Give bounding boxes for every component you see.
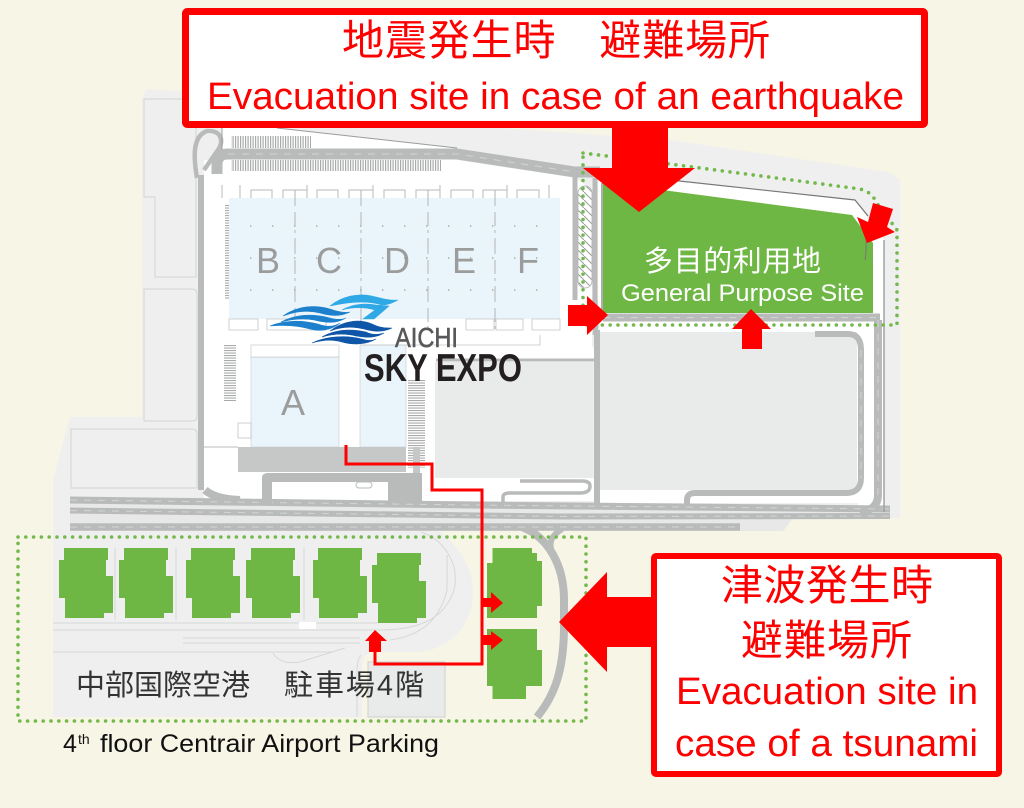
parking building 5 — [313, 548, 367, 618]
logo dark blue wave — [312, 321, 392, 344]
hall A service block — [251, 345, 339, 357]
hall letter E: E — [452, 240, 476, 281]
parking lot block — [368, 662, 445, 717]
evacuation route line — [346, 445, 482, 664]
red arrow: north east entry — [857, 203, 895, 243]
dotted boundary: earthquake site — [583, 153, 897, 325]
east exterior white strip — [858, 240, 884, 518]
hall letter B: B — [256, 240, 280, 281]
general purpose site green area — [603, 183, 873, 313]
hall column dots — [250, 226, 540, 290]
general purpose site margin — [598, 168, 884, 322]
red arrow: parking building 8 entry — [482, 631, 503, 650]
logo text SKY EXPO: SKY EXPO — [364, 347, 522, 390]
logo mid blue wave — [270, 307, 350, 330]
halls B to F — [229, 198, 560, 319]
hall letter D: D — [384, 240, 410, 281]
red arrow: earthquake main arrow — [583, 120, 695, 212]
parking building 7 — [487, 548, 542, 618]
hall dividers — [295, 190, 495, 330]
parking building 6 — [372, 553, 426, 623]
road band ground — [70, 497, 890, 531]
expo site white ground — [204, 160, 600, 501]
parking building 3 — [186, 548, 240, 618]
white ramp mark — [299, 622, 316, 629]
parking label English: floor Centrair Airport Parking — [100, 730, 439, 758]
south hall annexes — [229, 319, 560, 330]
parking building 1 — [59, 548, 113, 618]
north gate ticks — [222, 185, 549, 198]
roads — [70, 131, 890, 717]
parking label Japanese: 中部国際空港 — [76, 669, 250, 702]
parking building 8 — [487, 629, 542, 699]
road centre dashes — [70, 154, 890, 527]
hall A — [251, 357, 339, 447]
site map — [53, 89, 900, 717]
north white ground above road — [222, 128, 457, 160]
parking label Japanese — [76, 669, 424, 702]
hall annex — [360, 345, 406, 447]
logo: Aichi Sky Expo — [270, 295, 522, 390]
service band gray — [238, 447, 406, 472]
parking road lines — [53, 532, 455, 717]
south east white ground — [600, 320, 882, 503]
parking label English: 4 — [63, 730, 77, 758]
north fence lines — [222, 128, 457, 150]
logo light blue wave — [330, 295, 398, 319]
tsunami callout English line 2: case of a tsunami — [675, 723, 978, 765]
hall letter F: F — [517, 240, 539, 281]
red arrow: parking building 7 entry — [482, 592, 503, 613]
general purpose site Japanese label: 多目的利用地 — [644, 245, 821, 278]
left side lots — [71, 99, 197, 488]
east boundary line — [883, 240, 885, 512]
map base: airport island ground — [53, 89, 900, 717]
hall letters — [256, 240, 539, 423]
red arrow: west entry — [568, 296, 608, 335]
general purpose site English label: General Purpose Site — [621, 280, 864, 307]
parking building 2 — [119, 548, 173, 618]
hall letter C: C — [316, 240, 342, 281]
red arrow: tsunami main arrow — [559, 572, 655, 672]
tsunami callout Japanese line 1: 津波発生時 — [721, 562, 933, 609]
parking hatch rows — [231, 136, 311, 148]
diagonal parking pill — [578, 186, 592, 288]
callout: tsunami evacuation site — [654, 556, 999, 774]
red arrow: south entry — [732, 309, 771, 349]
red arrow: parking entry — [365, 630, 387, 652]
callout: earthquake evacuation site — [186, 12, 924, 124]
car parks gray — [435, 362, 593, 478]
entrance loop road — [262, 473, 422, 503]
earthquake callout Japanese heading: 地震発生時 避難場所 — [342, 17, 770, 64]
dotted boundary: tsunami site — [18, 537, 586, 721]
parking label Japanese: 駐車場4階 — [284, 669, 424, 702]
tsunami callout Japanese line 2: 避難場所 — [741, 617, 912, 664]
parking building 4 — [246, 548, 300, 618]
earthquake callout English heading: Evacuation site in case of an earthquake — [207, 76, 904, 118]
logo text AICHI: AICHI — [395, 322, 458, 353]
parking label English: th — [78, 731, 90, 747]
tsunami callout English line 1: Evacuation site in — [676, 671, 978, 713]
parking buildings — [59, 548, 542, 699]
hall letter A: A — [281, 382, 305, 423]
